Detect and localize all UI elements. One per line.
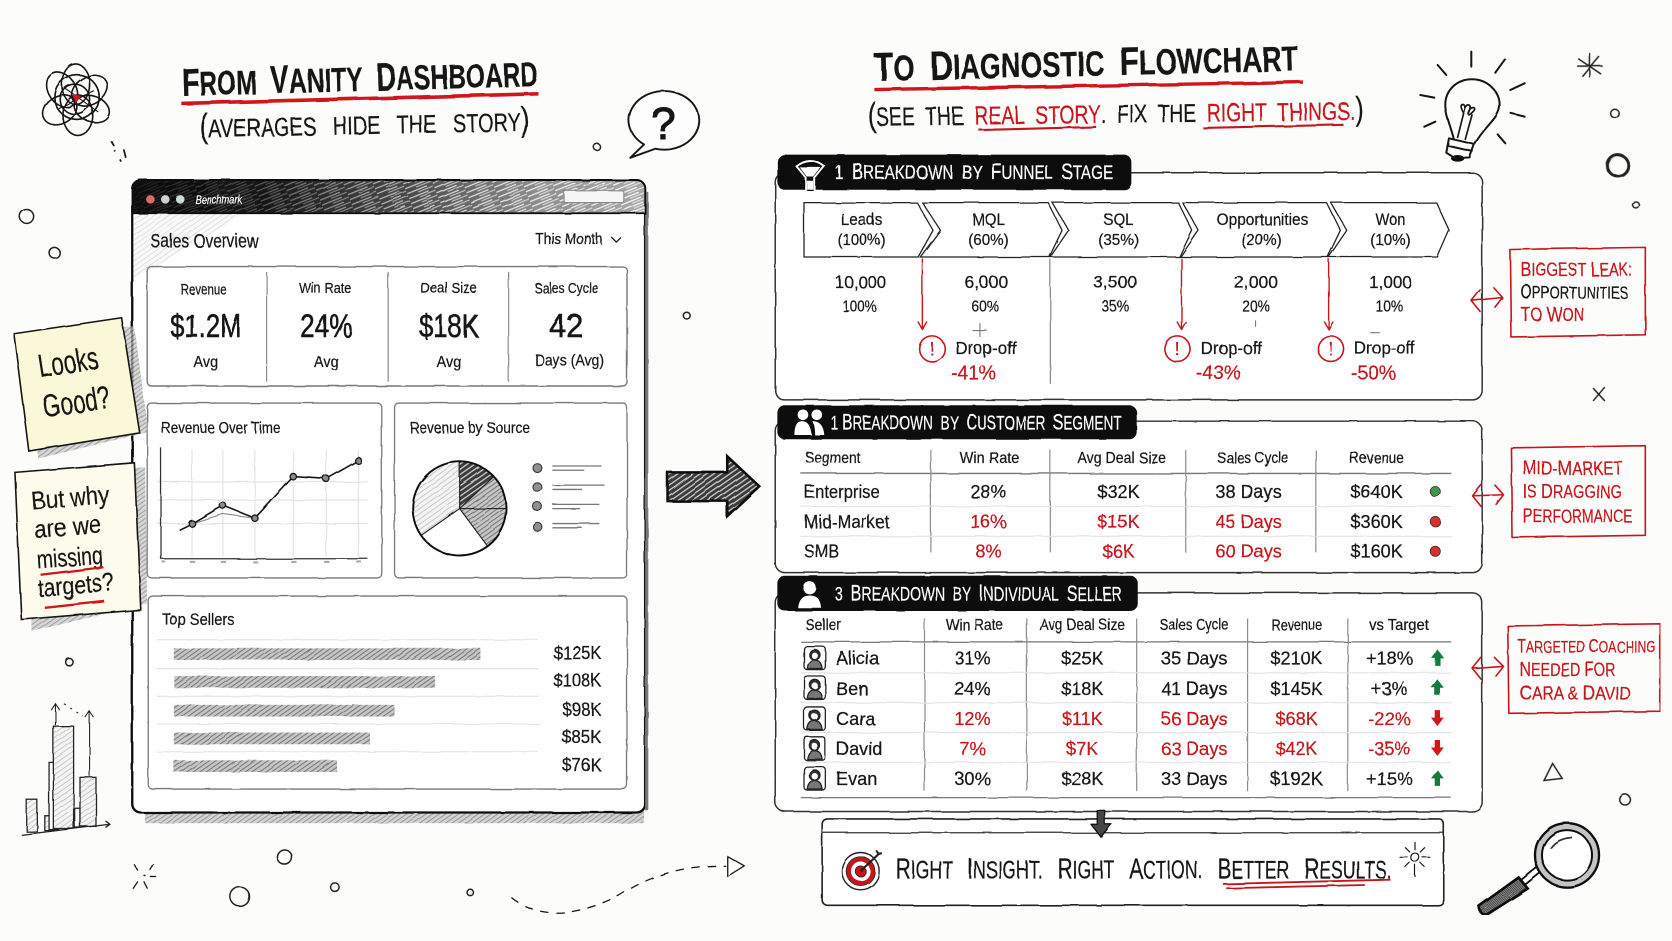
panel: revenue by source	[395, 403, 627, 578]
row: ben: $145K	[1270, 679, 1323, 699]
row: cara: Cara	[836, 709, 876, 729]
drop-off: SQL to opportunities: !	[1175, 339, 1180, 359]
panel: funnel stage breakdown	[775, 155, 1482, 400]
callout: targeted coaching: CARA & DAVID	[1519, 682, 1630, 704]
row: alicia: 31%	[954, 648, 991, 668]
panel: top sellers	[148, 596, 627, 789]
row: david: 63 Days	[1161, 739, 1227, 759]
decorative: scattered marks right	[1544, 53, 1639, 805]
row: evan: 30%	[954, 769, 991, 789]
panel: revenue over time: Revenue Over Time	[161, 420, 280, 437]
stage: opportunities: Opportunities	[1217, 210, 1308, 229]
row: mid-market: $360K	[1350, 512, 1403, 532]
stage: SQL: 3,500	[1094, 272, 1137, 292]
KPI: win rate: 24%	[300, 308, 352, 344]
KPI: deal size: $18K	[419, 308, 479, 344]
row: cara: -22%	[1368, 709, 1411, 729]
callout: mid-market: PERFORMANCE	[1523, 505, 1633, 527]
stage: won	[1369, 210, 1412, 315]
table header: Avg Deal Size	[1078, 450, 1166, 467]
row: SMB: $6K	[1102, 542, 1135, 562]
sticky note: why missing targets	[15, 463, 147, 631]
header: funnel stage	[777, 155, 1131, 192]
table header: Revenue	[1349, 450, 1404, 467]
stage: leads: Leads	[841, 210, 882, 229]
row: mid-market: Mid-Market	[804, 512, 889, 532]
stage: opportunities: 2,000	[1234, 272, 1278, 292]
sticky note: why missing targets: But why	[30, 481, 110, 516]
stage: SQL: SQL	[1104, 210, 1133, 229]
row: cara: $68K	[1275, 709, 1318, 729]
table header: Seller	[805, 617, 841, 634]
sticky note: why missing targets: are we	[33, 511, 103, 544]
table header: Avg Deal Size	[1040, 617, 1125, 634]
pie legend	[533, 464, 605, 531]
row: ben: +3%	[1371, 679, 1408, 699]
KPI: revenue	[170, 282, 242, 371]
bar values: $108K	[553, 671, 601, 691]
row: enterprise: $640K	[1350, 482, 1403, 502]
row: mid-market: 45 Days	[1215, 512, 1282, 532]
drop-off: leads to MQL: -41%	[951, 363, 996, 385]
row: evan	[804, 767, 1444, 790]
drop-off: opportunities to won: Drop-off	[1354, 338, 1415, 358]
icon: target	[842, 851, 882, 890]
KPI: deal size: Avg	[437, 354, 461, 371]
table header: Win Rate	[946, 617, 1003, 634]
callout: biggest leak: OPPORTUNITIES	[1521, 282, 1628, 304]
row: ben: 24%	[954, 679, 991, 699]
row: alicia: $25K	[1061, 648, 1103, 668]
row: SMB: $160K	[1350, 542, 1403, 562]
stage: won: (10%)	[1370, 232, 1411, 249]
stage: opportunities	[1217, 210, 1308, 315]
KPI: revenue: $1.2M	[170, 308, 242, 344]
title bar: Benchmark	[195, 194, 243, 207]
bar values: $125K	[553, 643, 601, 663]
stage: SQL	[1094, 210, 1139, 315]
funnel chevrons	[804, 203, 1449, 257]
row: enterprise: 38 Days	[1215, 482, 1282, 502]
row: mid-market: $15K	[1097, 512, 1140, 532]
row: mid-market	[804, 512, 1440, 532]
row: cara: 12%	[954, 709, 991, 729]
subtitle: averages hide the story: (AVERAGES HIDE THE STORY)	[199, 101, 530, 146]
row: SMB	[804, 542, 1440, 562]
stage: SQL: (35%)	[1098, 232, 1139, 249]
icon: small bar chart	[21, 704, 110, 835]
table header: Sales Cycle	[1217, 450, 1289, 467]
decorative: scattered circles left	[20, 144, 690, 906]
stage: won: Won	[1376, 210, 1405, 229]
stage: MQL: MQL	[972, 210, 1005, 229]
row: evan: $28K	[1061, 769, 1103, 789]
filter: this month: This Month	[535, 231, 602, 248]
icon: question speech bubble: ?	[651, 99, 676, 149]
KPI: win rate: Win Rate	[299, 281, 351, 297]
row: evan: $192K	[1270, 769, 1323, 789]
row: evan: +15%	[1366, 769, 1413, 789]
KPI: sales cycle	[534, 281, 604, 370]
table header: Sales Cycle	[1160, 617, 1229, 634]
sticky note: looks good	[14, 318, 148, 459]
dashed path arrow	[512, 856, 744, 913]
pie chart	[413, 462, 507, 556]
callout: targeted coaching	[1508, 624, 1660, 713]
row: mid-market: 16%	[970, 512, 1007, 532]
sticky note: looks good: Looks	[36, 339, 101, 384]
window: sales dashboard	[132, 180, 648, 823]
KPI: sales cycle: Sales Cycle	[534, 281, 598, 297]
stage: opportunities: (20%)	[1241, 232, 1282, 249]
drop-off: leads to MQL: !	[929, 339, 934, 359]
row: cara: $11K	[1062, 709, 1103, 729]
row: david: 7%	[959, 739, 986, 759]
row: alicia	[804, 646, 1444, 670]
callout: mid-market: IS DRAGGING	[1523, 481, 1622, 503]
icon: question speech bubble	[629, 91, 699, 158]
sticky note: why missing targets: targets?	[36, 569, 115, 603]
drop-off: SQL to opportunities	[1164, 259, 1262, 385]
callout: mid-market	[1511, 446, 1645, 537]
drop-off: SQL to opportunities: -43%	[1196, 363, 1241, 385]
KPI: sales cycle: Days (Avg)	[535, 353, 604, 370]
bar values: $76K	[562, 755, 601, 775]
stage: leads: (100%)	[838, 232, 886, 249]
icon: sparkle	[133, 865, 156, 888]
KPI: sales cycle: 42	[549, 308, 583, 344]
KPI: deal size	[419, 281, 479, 371]
KPI: win rate	[299, 281, 352, 371]
title: to diagnostic flowchart: TO DIAGNOSTIC FLOWCHART	[873, 34, 1299, 90]
title: from vanity dashboard: FROM VANITY DASHBOARD	[181, 51, 539, 105]
stage: MQL: (60%)	[968, 232, 1009, 249]
callout: biggest leak	[1510, 247, 1645, 337]
line chart series	[179, 457, 362, 530]
big arrow: from dashboard to flowchart	[668, 456, 759, 516]
row: enterprise: $32K	[1097, 482, 1140, 502]
drop-off: opportunities to won	[1318, 259, 1415, 385]
icon: magnifying glass	[1479, 823, 1599, 915]
header: customer segment: 1 BREAKDOWN BY CUSTOMER SEGMENT	[831, 410, 1122, 435]
row: enterprise	[804, 482, 1440, 502]
banner: right insight	[822, 819, 1444, 905]
table header	[805, 617, 1430, 634]
panel: KPI row	[147, 267, 627, 386]
header: funnel stage: 1 BREAKDOWN BY FUNNEL STAGE	[835, 159, 1113, 184]
table header: vs Target	[1369, 617, 1430, 634]
panel: customer segment breakdown	[775, 405, 1482, 573]
row: alicia: +18%	[1366, 648, 1413, 668]
drop-off: opportunities to won: !	[1328, 339, 1333, 359]
drop-off: leads to MQL	[918, 259, 1016, 385]
stage: MQL	[964, 210, 1009, 315]
row: evan: 33 Days	[1161, 769, 1227, 789]
icon: light bulb	[1420, 52, 1525, 162]
sticky note: looks good: Good?	[40, 379, 112, 425]
panel: revenue over time	[147, 403, 382, 578]
window shadow	[145, 810, 644, 823]
row: david: -35%	[1368, 739, 1411, 759]
drop-off: leads to MQL: Drop-off	[955, 338, 1016, 358]
stage: MQL: 60%	[971, 298, 999, 315]
row: cara: 56 Days	[1161, 709, 1227, 729]
header: individual seller	[777, 576, 1138, 611]
callout: biggest leak: TO WON	[1521, 304, 1585, 326]
arrow: biggest leak	[1472, 288, 1502, 311]
KPI: revenue: Avg	[194, 354, 218, 371]
row: evan: Evan	[836, 769, 877, 789]
row: ben: 41 Days	[1161, 679, 1227, 699]
stage: SQL: 35%	[1102, 298, 1129, 315]
stage: leads: 10,000	[835, 272, 886, 292]
sticky note: why missing targets: missing	[36, 542, 104, 574]
banner text: RIGHT INSIGHT. RIGHT ACTION. BETTER RESULTS.	[896, 854, 1392, 886]
row: ben: Ben	[836, 679, 868, 699]
table header: Segment	[805, 450, 861, 467]
panel: individual seller breakdown	[775, 576, 1482, 811]
KPI: deal size: Deal Size	[421, 281, 477, 297]
arrow: down to banner	[1091, 810, 1111, 837]
arrow: targeted coaching	[1473, 658, 1503, 679]
stage: won: 1,000	[1369, 272, 1412, 292]
callout: mid-market: MID-MARKET	[1523, 457, 1623, 479]
bar values: $85K	[562, 727, 601, 747]
row: enterprise: 28%	[970, 482, 1007, 502]
row: david	[804, 737, 1444, 760]
row: alicia: 35 Days	[1161, 648, 1227, 668]
bars	[174, 648, 481, 772]
stage: won: 10%	[1376, 298, 1403, 315]
row: alicia: $210K	[1270, 648, 1323, 668]
arrow: mid-market	[1473, 485, 1503, 506]
bar values	[553, 643, 601, 775]
subtitle: see the real story: (SEE THE REAL STORY. FIX THE RIGHT THINGS.)	[868, 91, 1364, 134]
stage: leads	[835, 210, 886, 315]
stage: opportunities: 20%	[1242, 298, 1270, 315]
header: customer segment	[777, 405, 1137, 439]
stage: MQL: 6,000	[964, 272, 1008, 292]
row: SMB: 60 Days	[1215, 542, 1282, 562]
table header: Win Rate	[960, 450, 1019, 467]
row: alicia: Alicia	[836, 648, 880, 668]
row: david: $42K	[1275, 739, 1318, 759]
row: SMB: 8%	[975, 542, 1002, 562]
drop-off: SQL to opportunities: Drop-off	[1201, 338, 1262, 358]
row: ben: $18K	[1061, 679, 1103, 699]
table header	[805, 450, 1404, 467]
bar values: $98K	[562, 699, 601, 719]
table header: Revenue	[1271, 617, 1322, 634]
row: cara	[804, 707, 1444, 730]
row: SMB: SMB	[804, 542, 839, 562]
icon: tangled scribble	[37, 64, 126, 162]
drop-off: opportunities to won: -50%	[1351, 363, 1396, 385]
panel: top sellers: Top Sellers	[162, 610, 235, 629]
row: david: David	[836, 739, 882, 759]
callout: targeted coaching: NEEDED FOR	[1519, 659, 1615, 681]
KPI: win rate: Avg	[314, 354, 339, 371]
stage: leads: 100%	[842, 298, 877, 315]
row: david: $7K	[1066, 739, 1098, 759]
row: ben	[804, 676, 1444, 699]
title bar	[132, 180, 645, 213]
header: individual seller: 3 BREAKDOWN BY INDIVIDUAL SELLER	[835, 580, 1122, 605]
KPI: revenue: Revenue	[181, 282, 227, 298]
row: enterprise: Enterprise	[804, 482, 880, 502]
icon: sun spark	[1400, 842, 1430, 876]
callout: biggest leak: BIGGEST LEAK:	[1521, 259, 1633, 281]
panel: revenue by source: Revenue by Source	[409, 420, 530, 437]
heading: sales overview: Sales Overview	[150, 231, 258, 252]
